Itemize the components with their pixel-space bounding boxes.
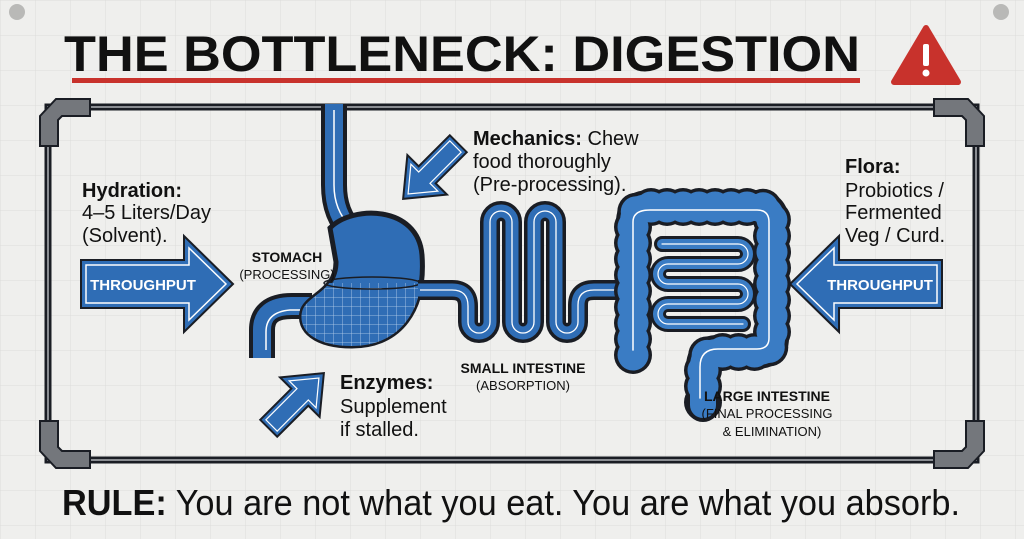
arrow: throughput left [81,236,233,332]
frame [40,99,984,468]
text: enzymes: Supplement [340,396,447,418]
large intestine [633,207,772,405]
text: hydration [82,180,211,247]
label: stomach: (PROCESSING) [239,267,335,282]
text: hydration: (Solvent). [82,225,168,247]
text: hydration: Hydration: [82,180,182,202]
text: enzymes [340,372,447,441]
arrow: throughput right: THROUGHPUT [827,277,933,294]
label: stomach [239,249,335,282]
stomach [262,213,422,358]
title: THE BOTTLENECK: DIGESTION [64,26,860,82]
label: large intestine: & ELIMINATION) [723,424,821,439]
text: mechanics: food thoroughly [473,151,611,173]
text: enzymes: if stalled. [340,419,419,441]
arrow: enzymes [249,353,344,448]
decorative screws [9,4,1009,20]
arrow: throughput right [790,236,942,332]
label: large intestine: LARGE INTESTINE [704,388,830,404]
rule: RULE: You are not what you eat. You are what you absorb. [62,482,960,523]
small intestine [418,211,625,333]
text: mechanics: (Pre-processing). [473,174,626,196]
arrow: mechanics [383,124,478,219]
arrow: throughput left: THROUGHPUT [90,277,196,294]
text: hydration: 4–5 Liters/Day [82,202,211,224]
label: large intestine: (FINAL PROCESSING [702,406,832,421]
label: stomach: STOMACH [252,249,322,265]
text: flora: Veg / Curd. [845,225,945,247]
label: small intestine: (ABSORPTION) [476,378,570,393]
text: flora [845,156,945,247]
text: enzymes: Enzymes: [340,372,433,394]
label: small intestine [461,360,585,393]
label: large intestine [702,388,832,439]
text: flora: Probiotics / [845,180,944,202]
text: mechanics [473,128,639,196]
text: flora: Fermented [845,202,942,224]
esophagus [334,104,352,232]
text: mechanics: Mechanics: Chew [473,128,639,150]
icon: warning [894,28,958,82]
text: flora: Flora: [845,156,901,178]
label: small intestine: SMALL INTESTINE [461,360,585,376]
